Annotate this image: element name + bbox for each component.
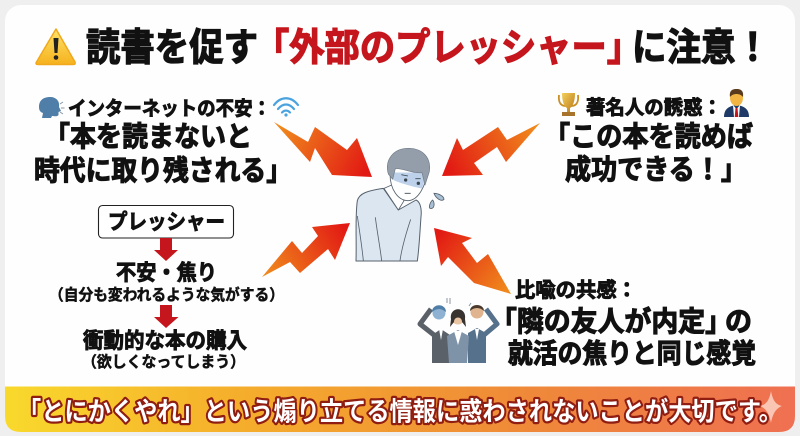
title xyxy=(86,28,770,70)
quote: celebrity temptation: 「この本を読めば xyxy=(544,121,753,152)
text: impulse note: （欲しくなってしまう） xyxy=(82,353,245,371)
illustration: worried man xyxy=(356,148,444,261)
icon: trophy xyxy=(559,93,578,116)
quote line 2: 成功できる！」 xyxy=(565,154,747,185)
quote line 2: 時代に取り残される」 xyxy=(34,155,292,186)
icon: businessman xyxy=(724,89,749,117)
title: に注意！ xyxy=(632,28,770,70)
panel: internet anxiety xyxy=(34,97,298,186)
quote: friend got a job: 「隣の友人が内定」 xyxy=(490,305,732,337)
arrow: down 1 xyxy=(154,238,178,261)
box: pressure xyxy=(98,206,234,238)
label: metaphor empathy: 比喩の共感： xyxy=(515,278,637,302)
title: 読書を促す xyxy=(86,28,258,70)
text: impulse buying: 衝動的な本の購入 xyxy=(83,329,247,353)
label: celebrity temptation: 著名人の誘惑： xyxy=(586,97,722,119)
quote particle: の xyxy=(725,306,752,337)
panel: metaphor empathy xyxy=(420,278,756,369)
text: anxiety: 不安・焦り xyxy=(116,261,217,285)
arrow: lightning top-left xyxy=(274,122,372,177)
icon: wifi xyxy=(274,98,298,117)
panel: pressure flow xyxy=(49,206,284,371)
quote: internet anxiety: 「本を読まないと xyxy=(44,121,252,152)
icon: warning triangle xyxy=(36,29,75,64)
icon: speaking head xyxy=(39,97,64,118)
banner: conclusion xyxy=(5,386,795,432)
text: anxiety note: （自分も変われるような気がする） xyxy=(49,285,284,304)
quote line 2: 就活の焦りと同じ感覚 xyxy=(508,339,756,369)
label: internet anxiety: インターネットの不安： xyxy=(68,98,271,120)
box: pressure: プレッシャー xyxy=(108,211,225,234)
title: 「外部のプレッシャー」 xyxy=(254,28,642,70)
arrow: down 2 xyxy=(154,305,178,328)
arrow: lightning bottom-right xyxy=(434,228,511,294)
illustration: three job seekers xyxy=(420,298,497,363)
arrow: lightning top-right xyxy=(442,123,540,176)
arrow: lightning bottom-left xyxy=(262,223,350,277)
icon: sparkle xyxy=(760,391,782,423)
panel: celebrity temptation xyxy=(544,89,753,185)
